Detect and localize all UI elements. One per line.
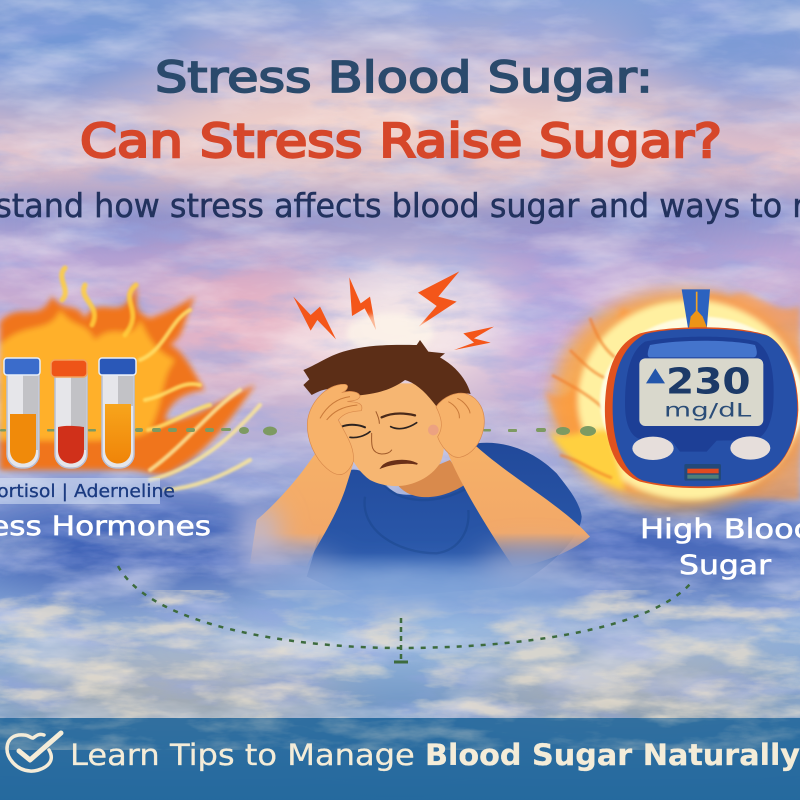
screen bezel xyxy=(625,337,774,452)
icon: glucose meter xyxy=(600,289,800,488)
cheek blush xyxy=(428,425,439,435)
neck xyxy=(397,460,467,497)
hand right xyxy=(436,393,484,458)
head xyxy=(338,383,444,486)
icon: flames around meter xyxy=(545,290,800,510)
tube 2 red xyxy=(51,360,87,468)
icon: heart check xyxy=(7,733,61,771)
bezel highlight xyxy=(648,341,757,357)
icon: glucose meter: 230 xyxy=(666,362,751,403)
heading: second line: Can Stress Raise Sugar? xyxy=(80,114,722,168)
face features xyxy=(342,412,417,454)
illustration: stressed man xyxy=(250,271,590,600)
strip port xyxy=(684,464,721,481)
icon: test tubes xyxy=(4,358,136,468)
dashed connector: right xyxy=(483,426,596,436)
shirt xyxy=(307,443,582,600)
dashed connector: left xyxy=(0,426,277,436)
title xyxy=(80,53,722,168)
tube 3 orange xyxy=(99,358,136,468)
reading xyxy=(646,368,665,383)
tube 1 orange xyxy=(4,358,40,468)
label: high blood sugar: High Blood xyxy=(640,514,800,545)
label: high blood sugar xyxy=(640,514,800,581)
white halo xyxy=(598,316,800,444)
glow above head xyxy=(348,311,432,348)
test strip xyxy=(682,289,710,330)
haze: clouds over the figure's lower edge xyxy=(236,503,590,612)
dashed curve connector xyxy=(118,566,692,662)
arms xyxy=(250,447,353,567)
icon: flames behind tubes xyxy=(0,268,260,490)
hair xyxy=(303,340,471,407)
hand left xyxy=(307,384,362,475)
lightning bolts xyxy=(293,271,494,350)
heading: first line: Stress Blood Sugar: xyxy=(155,53,653,103)
banner text: Learn Tips to Manage Blood Sugar Naturally xyxy=(70,738,800,772)
screen xyxy=(639,358,763,426)
panel: bottom banner xyxy=(0,718,800,800)
mouth xyxy=(382,461,417,467)
icon: glucose meter: mg/dL xyxy=(664,401,752,422)
label: high blood sugar: Sugar xyxy=(679,550,772,581)
meter body xyxy=(605,327,798,488)
buttons xyxy=(632,437,674,460)
